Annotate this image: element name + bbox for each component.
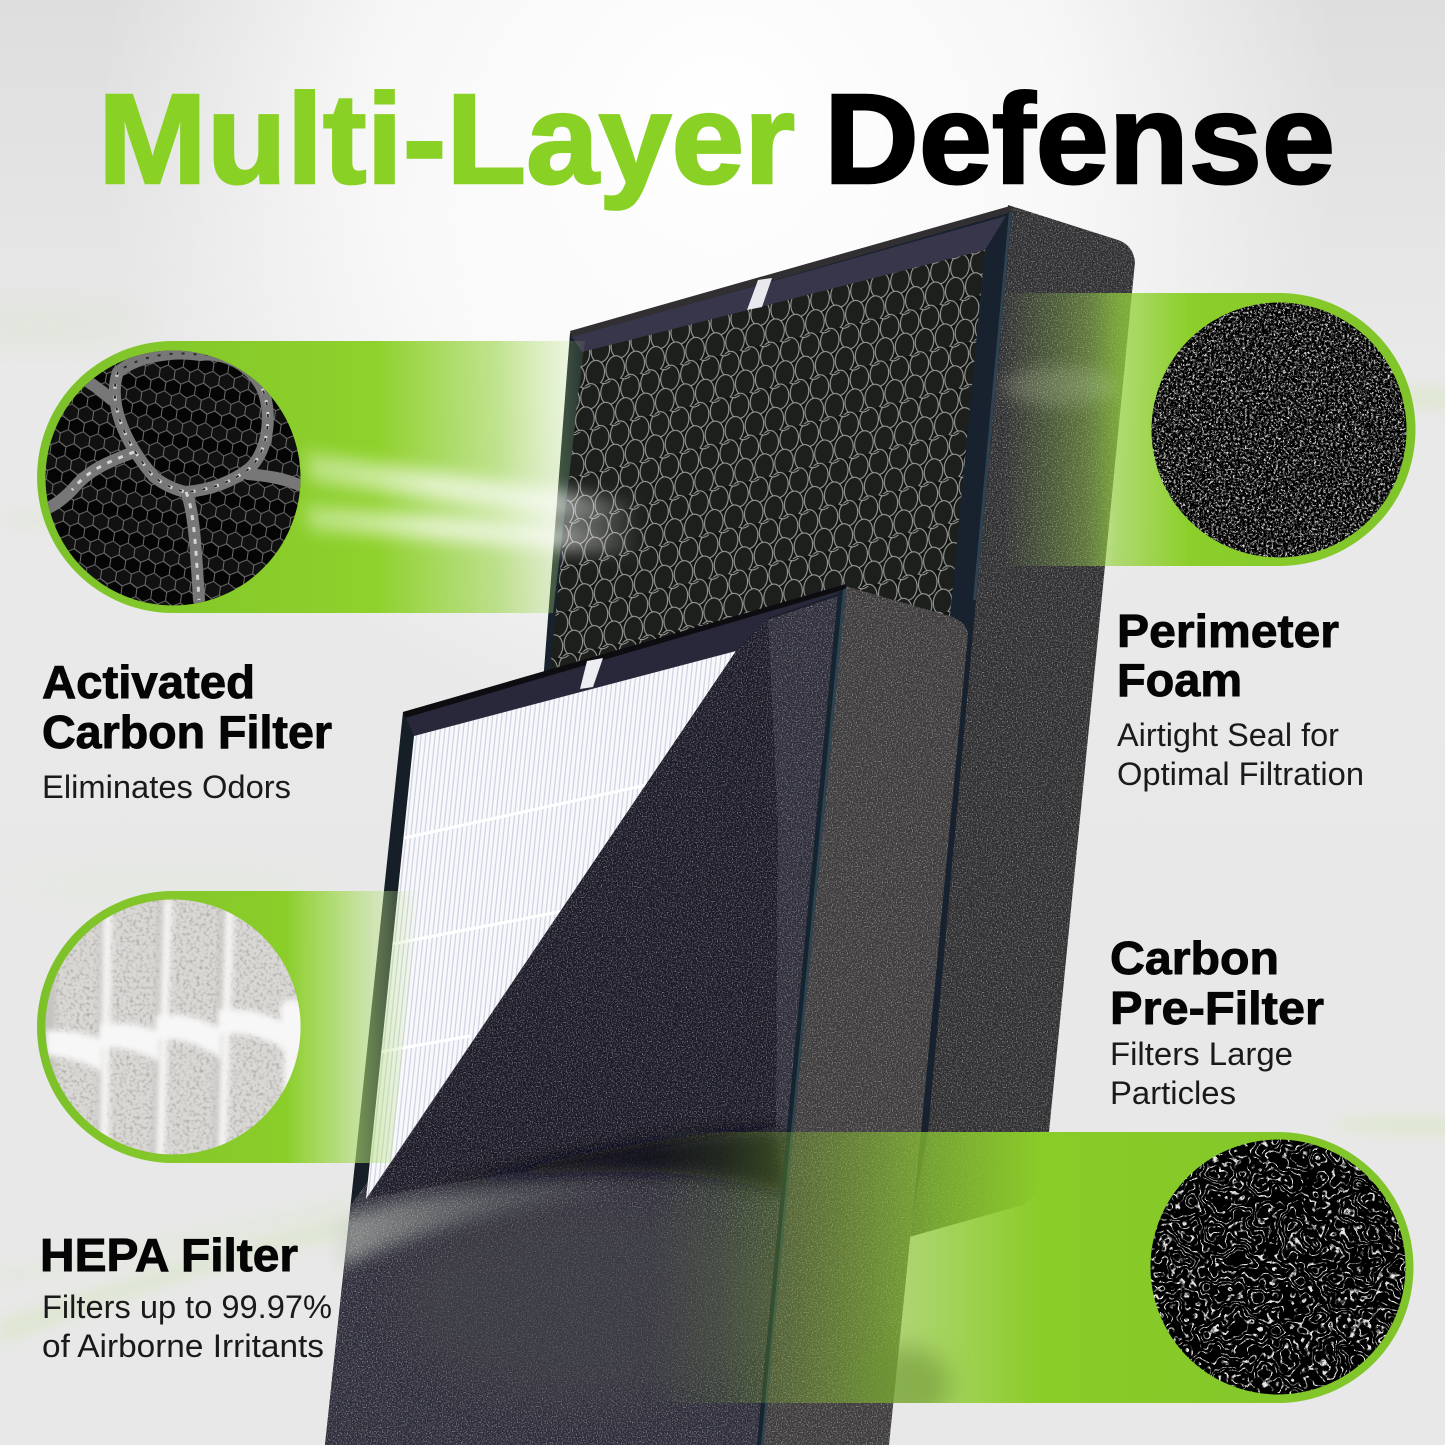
pre-filter pad — [325, 596, 838, 1445]
band shadow beside foam — [860, 1347, 950, 1423]
label: activated carbon filter: Eliminates Odors — [42, 769, 291, 805]
zoom circle: open-cell foam — [1150, 300, 1410, 560]
title: Defense — [824, 68, 1335, 211]
zoom circle: carbon mesh — [46, 350, 300, 606]
label: perimeter foam — [1117, 605, 1364, 792]
label: perimeter foam: Perimeter — [1117, 605, 1339, 657]
HEPA pleated media — [366, 651, 736, 1199]
carbon honeycomb panel — [545, 250, 985, 720]
label: HEPA filter — [40, 1229, 332, 1364]
front frame — [325, 586, 846, 1445]
label: perimeter foam: Airtight Seal for — [1117, 717, 1339, 753]
lower mist — [336, 1182, 640, 1268]
label: HEPA filter: HEPA Filter — [40, 1229, 298, 1281]
label: activated carbon filter: Activated — [42, 656, 255, 708]
zoom circle: fibrous pre-filter — [1148, 1137, 1408, 1397]
HEPA glue strips — [380, 782, 660, 1052]
perimeter foam side, back filter — [909, 205, 1135, 1237]
zoom circle: HEPA pleats — [40, 895, 310, 1160]
pull tab, back filter — [747, 278, 772, 310]
air streaks — [305, 452, 640, 556]
back filter top lip — [570, 206, 1012, 338]
frame highlight line — [757, 588, 846, 1445]
folded pre-filter flap — [368, 618, 778, 1198]
label: activated carbon filter: Carbon Filter — [42, 706, 332, 758]
label: carbon pre-filter — [1110, 932, 1324, 1111]
label: HEPA filter: Filters up to 99.97% — [42, 1289, 332, 1325]
front foam side — [763, 586, 968, 1445]
back filter frame — [500, 210, 1012, 1240]
flap shadow — [430, 1130, 790, 1195]
front filter: HEPA with carbon pre-filter — [325, 584, 968, 1445]
title: Multi-Layer — [98, 68, 795, 211]
air mist — [1002, 366, 1118, 406]
pull tab, front filter — [580, 658, 603, 689]
green band: HEPA — [37, 891, 420, 1163]
top bar — [405, 586, 846, 736]
back filter top bar — [572, 216, 1006, 352]
label: perimeter foam: Foam — [1117, 654, 1242, 706]
green band: activated carbon — [37, 341, 640, 615]
green band: carbon pre-filter — [336, 1132, 1414, 1423]
label: carbon pre-filter: Carbon — [1110, 932, 1279, 984]
label: carbon pre-filter: Filters Large — [1110, 1036, 1293, 1072]
label: HEPA filter: of Airborne Irritants — [42, 1328, 324, 1364]
label: carbon pre-filter: Particles — [1110, 1075, 1236, 1111]
label: activated carbon filter — [42, 656, 332, 805]
back filter: activated carbon panel with perimeter foam — [500, 205, 1135, 1240]
label: perimeter foam: Optimal Filtration — [1117, 756, 1364, 792]
label: carbon pre-filter: Pre-Filter — [1110, 982, 1324, 1034]
title — [98, 68, 1335, 211]
green band: perimeter foam — [1002, 293, 1416, 566]
pad lighter area — [400, 1200, 780, 1400]
